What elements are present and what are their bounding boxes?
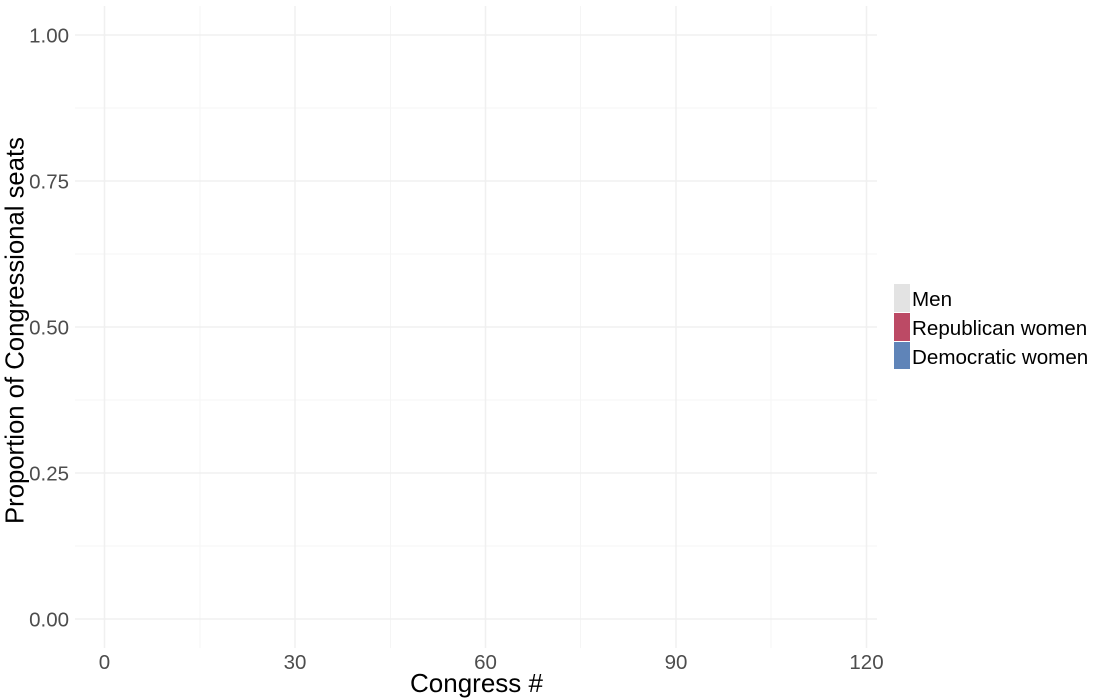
y-axis tick labels: 0.00 [29, 608, 69, 632]
x-axis tick labels: 30 [284, 651, 306, 674]
x-axis tick labels: 90 [665, 651, 687, 674]
legend item: Democratic women: Democratic women [912, 346, 1088, 369]
legend item: Men: Men [912, 288, 952, 311]
x-axis tick labels: 0 [99, 651, 110, 674]
x-axis title: Congress # [410, 668, 544, 698]
y-axis tick labels: 1.00 [29, 24, 69, 48]
plot grid [75, 6, 877, 648]
x-axis tick labels: 120 [849, 651, 884, 674]
legend item: Men [894, 284, 952, 312]
x-axis tick labels: 60 [474, 651, 497, 674]
x-axis tick labels [99, 651, 884, 674]
y-axis title: Proportion of Congressional seats [2, 137, 30, 524]
legend [894, 284, 1088, 369]
y-axis tick labels: 0.75 [29, 170, 69, 194]
legend item: Republican women: Republican women [912, 317, 1087, 340]
y-axis tick labels: 0.25 [29, 462, 69, 486]
y-axis tick labels [29, 24, 69, 632]
y-axis tick labels: 0.50 [29, 316, 69, 340]
